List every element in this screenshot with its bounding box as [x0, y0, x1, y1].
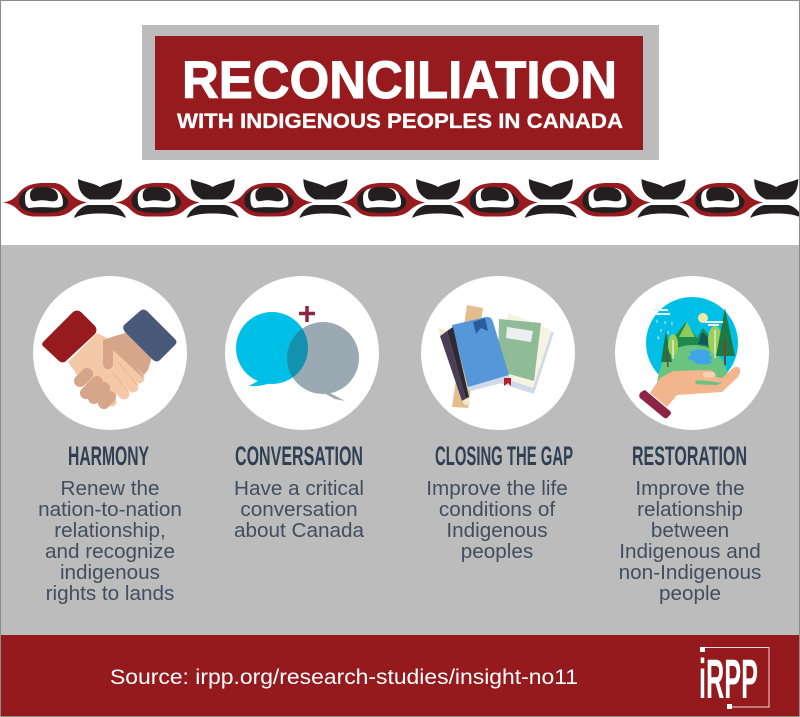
description: harmony: nation-to-nation	[38, 498, 182, 521]
heading: harmony: HARMONY	[68, 441, 149, 471]
description: harmony: Renew the	[61, 477, 159, 500]
description: conversation: Have a critical	[234, 477, 364, 500]
icon: plus	[299, 306, 315, 322]
panel: harmony	[33, 276, 187, 605]
source line: Source: irpp.org/research-studies/insight-no11	[110, 666, 578, 689]
panel: conversation	[225, 276, 379, 542]
title banner	[142, 25, 659, 160]
description: restoration: people	[659, 582, 721, 605]
description: harmony: relationship,	[54, 519, 166, 542]
title: RECONCILIATION	[182, 51, 617, 110]
description: restoration: Improve the	[635, 477, 745, 500]
decorative band: eye and whale tail motif	[2, 179, 800, 218]
logo: IRPP	[699, 647, 769, 710]
description: restoration: relationship	[637, 498, 743, 521]
description: restoration: Indigenous and	[619, 540, 761, 563]
description: harmony: indigenous	[60, 561, 160, 584]
icon: books, ruler and pencil	[421, 276, 575, 430]
description: closing the gap: peoples	[461, 540, 533, 563]
description: restoration: non-Indigenous	[619, 561, 761, 584]
subtitle: WITH INDIGENOUS PEOPLES IN CANADA	[177, 109, 623, 133]
icon: hand holding landscape	[615, 276, 769, 430]
description: closing the gap: conditions of	[439, 498, 555, 521]
footer bar	[0, 635, 800, 717]
description: conversation: about Canada	[234, 519, 364, 542]
panel: restoration	[615, 276, 769, 605]
description: closing the gap: Improve the life	[426, 477, 568, 500]
description: harmony: rights to lands	[46, 582, 174, 605]
panel: closing the gap	[421, 276, 575, 563]
icon: speech bubbles	[225, 276, 379, 430]
description: harmony: and recognize	[45, 540, 175, 563]
heading: closing the gap: CLOSING THE GAP	[435, 441, 573, 471]
description: restoration: between	[651, 519, 729, 542]
icon: handshake	[33, 276, 187, 430]
heading: conversation: CONVERSATION	[235, 441, 363, 471]
description: conversation: conversation	[240, 498, 358, 521]
description: closing the gap: Indigenous	[446, 519, 548, 542]
grey content panel	[0, 245, 800, 635]
